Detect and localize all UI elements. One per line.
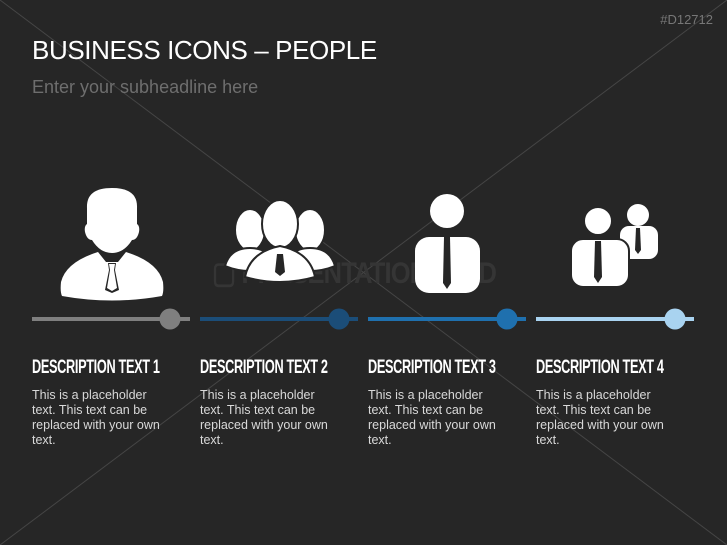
description 4: DESCRIPTION TEXT 4 [536, 357, 664, 378]
description 2: DESCRIPTION TEXT 2 [200, 357, 328, 378]
watermark: ▢ PRESENTATIONLOAD [212, 257, 496, 290]
text: This is a placeholder text. This text can be replaced with your own text. [368, 388, 496, 447]
icon: person with tie [415, 194, 480, 293]
subheadline: Enter your subheadline here [32, 77, 258, 97]
text: This is a placeholder text. This text can be replaced with your own text. [32, 388, 160, 447]
icon: businessman [61, 188, 163, 300]
icon: group [225, 200, 335, 282]
icon: two persons [571, 204, 658, 287]
text: This is a placeholder text. This text can be replaced with your own text. [200, 388, 328, 447]
text: This is a placeholder text. This text can be replaced with your own text. [536, 388, 664, 447]
description 3: DESCRIPTION TEXT 3 [368, 357, 496, 378]
code label: #D12712 [660, 12, 713, 27]
title: BUSINESS ICONS – PEOPLE [32, 35, 377, 65]
description 1: DESCRIPTION TEXT 1 [32, 357, 160, 378]
